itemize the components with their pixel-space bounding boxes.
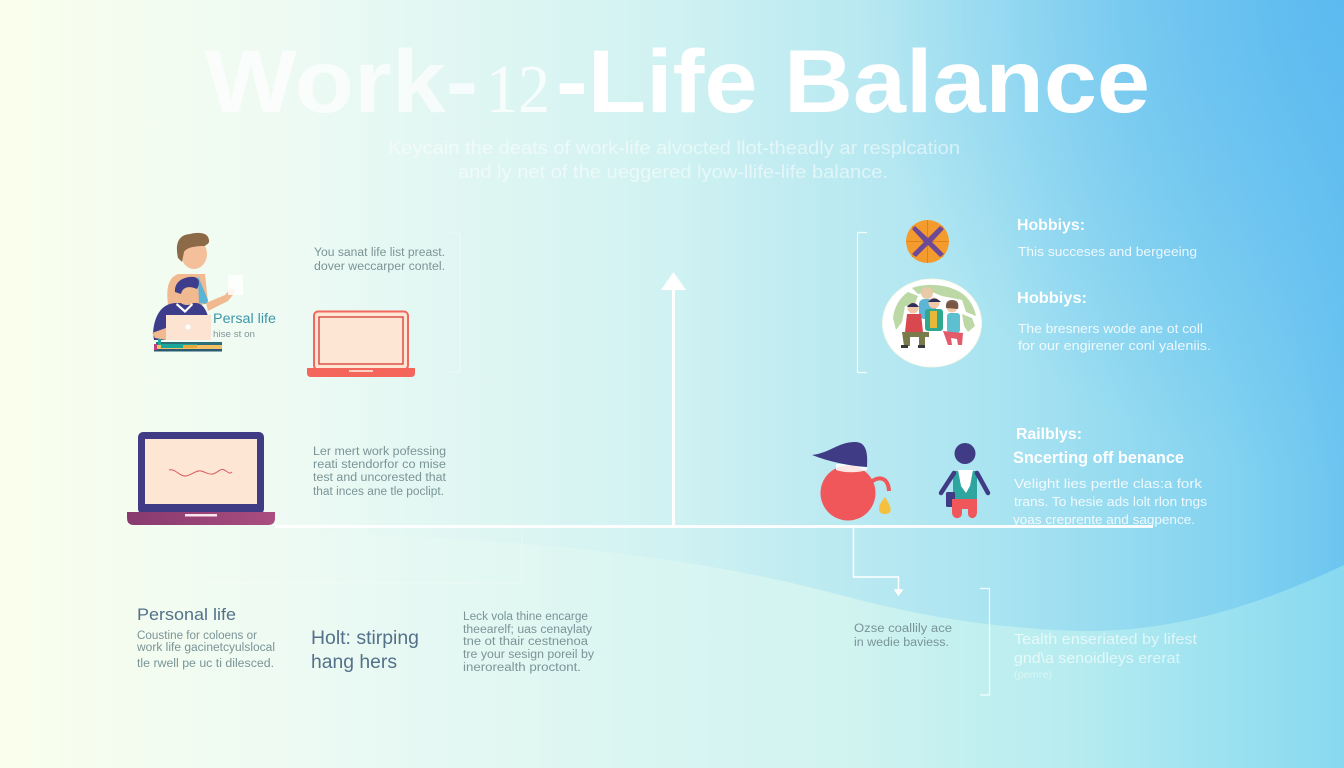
- text block: railbilys: Sncerting off benance: [1013, 449, 1184, 467]
- text block: lower middle description: theearelf; uas cenaylaty: [463, 624, 592, 636]
- title: 12: [486, 51, 550, 127]
- text block: middle left description: test and uncorested that: [313, 472, 447, 484]
- text block: personal life: [136, 606, 275, 670]
- text block: middle left description: that inces ane tle poclipt.: [313, 486, 444, 498]
- text block: health: gnd\a senoidleys ererat: [1014, 650, 1181, 667]
- text block: middle left description: Ler mert work pofessing: [313, 446, 446, 458]
- axis chart: horizontal baseline and vertical arrow: [275, 272, 1153, 528]
- text block: railbilys: yoas creprente and sagpence.: [1013, 512, 1195, 527]
- text block: railbilys: Railblys:: [1016, 426, 1082, 443]
- person: middle seated: [925, 298, 943, 331]
- background lower wave: [0, 530, 1344, 768]
- bracket: upper right: [858, 232, 867, 372]
- text block: lower right small: [854, 623, 952, 649]
- text block: health: (pemre): [1014, 670, 1052, 681]
- bracket: lower right: [980, 588, 990, 695]
- text block: hobbies two: for our engirener conl yaleniis.: [1018, 338, 1211, 353]
- text block: personal life: work life gacinetcyulslocal: [136, 642, 275, 654]
- text block: personal life: tle rwell pe uc ti dilesced.: [137, 658, 274, 670]
- icon: person with laptop and books: [152, 233, 243, 352]
- text block: lower middle description: [463, 611, 594, 674]
- text block: railbilys: Velight lies pertle clas:a fork: [1014, 476, 1203, 491]
- text block: hobbies one: [1017, 217, 1197, 259]
- text block: health: [1014, 631, 1198, 681]
- faint guide brackets: [198, 233, 522, 583]
- text block: lower middle description: tne ot thair cestnenoa: [463, 636, 589, 648]
- standing man: [167, 233, 243, 312]
- title: Work-: [205, 31, 478, 131]
- text block: hobbies two: Hobbiys:: [1017, 290, 1087, 307]
- text block: hobbies one: This succeses and bergeeing: [1018, 244, 1197, 259]
- label: personal life small: hise st on: [213, 329, 255, 340]
- text block: lower middle description: inerorealth proctont.: [463, 662, 581, 674]
- text block: middle left description: reati stendorfor co mise: [313, 459, 446, 471]
- icon: purple laptop: [127, 432, 275, 525]
- text block: holt stirping: Holt: stirping: [311, 628, 419, 649]
- title: [205, 31, 1150, 131]
- text block: holt stirping: hang hers: [311, 652, 397, 673]
- text block: lower right small: in wedie baviess.: [854, 637, 949, 649]
- text block: lower middle description: tre your sesign poreil by: [463, 649, 594, 661]
- text block: top left description: [314, 247, 445, 273]
- subtitle: Keycain the deats of work-life alvocted llot-theadly ar resplcation: [388, 138, 960, 158]
- person: left seated: [901, 302, 929, 348]
- subtitle: and ly net of the ueggered lyow-llife-life balance.: [458, 162, 888, 182]
- icon: red jug with navy hair: [812, 442, 891, 520]
- icon: standing person: [941, 443, 988, 518]
- icon: group of people on globe: [882, 279, 982, 367]
- text block: health: Tealth enseriated by lifest: [1014, 631, 1198, 648]
- text block: hobbies two: [1017, 290, 1211, 353]
- subtitle: [388, 138, 960, 182]
- stack of books: [154, 339, 222, 352]
- text block: hobbies two: The bresners wode ane ot coll: [1018, 321, 1203, 336]
- text block: railbilys: [1013, 426, 1208, 527]
- icon: red laptop: [307, 312, 415, 377]
- text block: top left description: dover weccarper contel.: [314, 261, 445, 273]
- label: personal life small: [213, 311, 276, 340]
- label: personal life small: Persal life: [213, 311, 276, 326]
- person: older man: [919, 287, 936, 319]
- seated man: [152, 277, 211, 340]
- person: right seated: [943, 300, 963, 345]
- arrow: elbow connector down: [854, 527, 902, 595]
- title: -Life Balance: [556, 31, 1150, 131]
- text block: lower middle description: Leck vola thine encarge: [463, 611, 588, 623]
- text block: railbilys: trans. To hesie ads lolt rlon tngs: [1014, 494, 1208, 509]
- text block: personal life: Personal life: [137, 606, 236, 624]
- text block: middle left description: [313, 446, 447, 498]
- text block: personal life: Coustine for coloens or: [137, 630, 257, 642]
- icon: orange ball: [906, 220, 949, 263]
- text block: lower right small: Ozse coallily ace: [854, 623, 952, 635]
- text block: top left description: You sanat life list preast.: [314, 247, 445, 259]
- text block: hobbies one: Hobbiys:: [1017, 217, 1085, 234]
- text block: holt stirping: [311, 628, 419, 673]
